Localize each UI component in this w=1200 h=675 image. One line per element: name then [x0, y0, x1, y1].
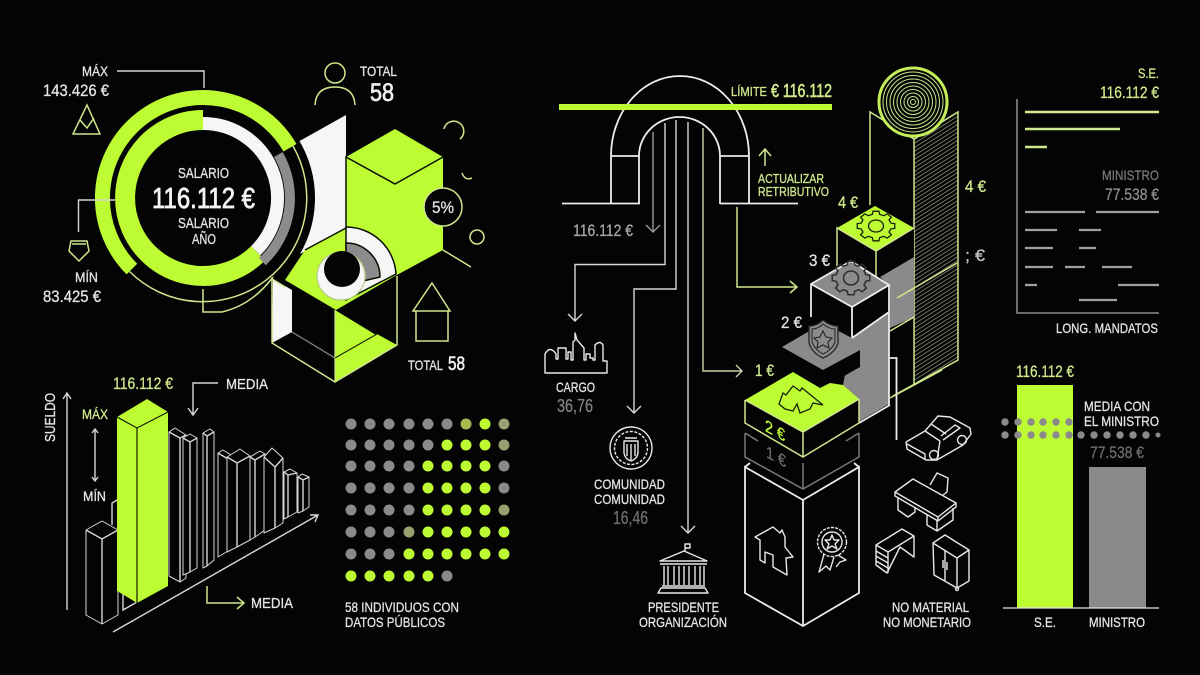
- step 3 block: [811, 261, 889, 405]
- lower media label: [207, 586, 293, 612]
- arch: [562, 76, 798, 204]
- arrow: short: [646, 132, 660, 232]
- comunidad block: 16,46: [613, 508, 648, 528]
- centre text: SALARIO: [178, 166, 229, 182]
- ministro value: 77.538 €: [1090, 443, 1144, 462]
- dot caption: DATOS PÚBLICOS: [345, 614, 445, 630]
- grey quarter ring: [346, 243, 380, 285]
- arrow: comunidad: [627, 120, 676, 413]
- thin min bar: [112, 500, 137, 610]
- icon: person: [315, 63, 355, 105]
- panel: comparison bar chart: [1001, 362, 1160, 630]
- y axis arrow: [63, 393, 71, 610]
- dot matrix: 58 individuals: [345, 418, 510, 630]
- icon: gear on step 3: [832, 261, 870, 295]
- white base box: [745, 463, 859, 626]
- connector lines: [890, 263, 957, 398]
- icon: wardrobe: [933, 535, 969, 590]
- grey bar: [1089, 467, 1146, 608]
- dot caption: 58 INDIVIDUOS CON: [345, 599, 459, 615]
- total people: [315, 63, 397, 107]
- green bar: [1017, 385, 1073, 608]
- ministro label: [1102, 167, 1159, 204]
- media label: EL MINISTRO: [1084, 413, 1159, 429]
- axes: [1017, 99, 1159, 313]
- decorative arcs and circle: [443, 121, 484, 267]
- ghost grey block: [745, 433, 859, 489]
- white arc: [203, 123, 278, 251]
- S.E. value: 116.112 €: [1016, 362, 1074, 381]
- step labels: 4 €: [838, 193, 858, 212]
- media label: MEDIA CON: [1084, 398, 1150, 414]
- icon: gear on step 4: [857, 211, 895, 241]
- presidente block: PRESIDENTE: [648, 599, 719, 615]
- step 4 block: [837, 206, 914, 291]
- ghost grey block: 1 €: [766, 442, 787, 472]
- axis label: LONG. MANDATOS: [1056, 320, 1158, 336]
- caption: [883, 599, 971, 630]
- callout: min salary: 83.425 €: [43, 287, 101, 306]
- icon: police badge: [809, 320, 838, 358]
- grey bars: [1025, 212, 1159, 300]
- icon: car: [906, 416, 971, 460]
- icon: city skyline: [545, 333, 607, 373]
- arrow: step one: [703, 128, 742, 377]
- presidente block: ORGANIZACIÓN: [639, 614, 727, 630]
- quarter circle: [346, 227, 396, 300]
- S.E. label: S.E.: [1138, 65, 1159, 81]
- comunidad block: COMUNIDAD: [594, 491, 665, 507]
- caption: NO MATERIAL: [892, 599, 969, 615]
- green bars: [1025, 112, 1159, 147]
- step labels: 2 €: [781, 313, 802, 332]
- value label: 116.112 €: [113, 374, 173, 393]
- centre text: 116.112 €: [152, 183, 255, 215]
- S.E. label: [1100, 65, 1159, 102]
- x labels: MINISTRO: [1089, 614, 1145, 630]
- non monetary items: [876, 416, 971, 630]
- callout: max salary: [43, 64, 204, 134]
- limit label: LÍMITE: [731, 84, 767, 99]
- limit bar: [559, 104, 832, 110]
- amount label: 116.112 €: [573, 221, 633, 240]
- cargo block: [545, 333, 607, 416]
- 5% badge: [424, 188, 462, 226]
- grey faces: [843, 257, 914, 421]
- caption: NO MONETARIO: [883, 614, 971, 630]
- total people: TOTAL: [360, 64, 397, 79]
- connector: bottom of donut: [203, 277, 273, 312]
- callout: max salary: MÁX: [82, 64, 108, 79]
- icon: small desk with drawers: [876, 529, 914, 573]
- label: step on face: 2 €: [765, 416, 786, 446]
- update label: RETRIBUTIVO: [758, 184, 829, 199]
- range labels: MÁX: [82, 406, 109, 422]
- callout: max salary: 143.426 €: [43, 81, 109, 100]
- total houses: TOTAL: [408, 358, 443, 373]
- step labels: 1 €: [755, 361, 774, 380]
- icon: house: [413, 283, 450, 341]
- flow diagram: arch and limit: [559, 76, 832, 533]
- icon: crest seal: [610, 427, 652, 469]
- comunidad block: COMUNIDAD: [594, 476, 665, 492]
- arrow: to steps: [737, 207, 797, 293]
- limit label: [731, 81, 832, 101]
- range labels: [82, 406, 109, 504]
- S.E. label: 116.112 €: [1100, 83, 1159, 102]
- 5% badge: 5%: [432, 198, 454, 217]
- media label: MEDIA: [226, 376, 268, 393]
- panel: mandate length chart: [1017, 65, 1159, 336]
- icon: shield: [69, 241, 89, 261]
- total houses: [408, 283, 465, 375]
- dots: [346, 418, 510, 582]
- donut chart: salario: [102, 98, 307, 302]
- update label: [758, 149, 829, 199]
- step labels: ; €: [965, 246, 986, 265]
- panel: isometric shapes behind donut: [91, 86, 484, 382]
- x labels: [1034, 614, 1145, 630]
- step labels: 3 €: [809, 251, 830, 270]
- eye circle: [317, 251, 365, 300]
- icon: institution building: [658, 544, 708, 593]
- centre text: [152, 166, 255, 248]
- icon: rosette: [818, 528, 846, 572]
- update label: ACTUALIZAR: [758, 171, 824, 186]
- wood log: [879, 68, 947, 136]
- grey arc: [262, 154, 290, 262]
- hatched tower: [870, 112, 958, 396]
- centre text: SALARIO: [178, 216, 229, 232]
- dotted average rows: [1001, 418, 1160, 439]
- bars: [86, 428, 309, 624]
- inner green ring: [125, 120, 258, 276]
- ministro label: 77.538 €: [1105, 185, 1159, 204]
- step 1 green block: [745, 372, 859, 457]
- step 2 block: [782, 320, 860, 400]
- dot caption: [345, 599, 459, 630]
- lower media label: MEDIA: [251, 595, 293, 612]
- media label: [188, 376, 268, 415]
- range labels: MÍN: [83, 488, 106, 504]
- callout: min salary: [43, 200, 115, 306]
- thin arc: [130, 146, 307, 302]
- outer green ring: [102, 98, 290, 269]
- y axis label: SUELDO: [42, 393, 59, 442]
- x axis arrow: [113, 515, 318, 632]
- hexagon inner edges: [305, 157, 443, 250]
- ministro label: MINISTRO: [1102, 167, 1159, 183]
- highlighted green bar: [117, 399, 168, 603]
- green hexagon: [285, 129, 443, 310]
- cargo block: 36,76: [557, 396, 593, 416]
- isometric tower with steps: [745, 68, 958, 626]
- icon: desk: [895, 473, 956, 531]
- presidente block: [639, 544, 727, 630]
- arrow: cargo: [568, 123, 665, 321]
- baseline: [1003, 607, 1159, 609]
- step labels: 4 €: [965, 177, 986, 196]
- centre text: AÑO: [192, 231, 216, 248]
- limit label: € 116.112: [771, 81, 832, 101]
- isometric bar chart: [42, 374, 318, 632]
- lower cube: [272, 276, 397, 382]
- total houses: 58: [448, 354, 465, 375]
- x labels: S.E.: [1034, 614, 1056, 630]
- icon: house on green top: [779, 386, 823, 413]
- total people: 58: [370, 79, 394, 107]
- arrow: presidente: [681, 122, 695, 533]
- first bar: [86, 521, 118, 624]
- media label: [1084, 398, 1159, 429]
- comunidad block: [594, 427, 665, 528]
- icon: iso house: [755, 527, 793, 575]
- step labels: [755, 177, 986, 380]
- icon: mountain: [73, 105, 100, 134]
- cargo block: CARGO: [556, 379, 595, 395]
- callout: min salary: MÍN: [75, 270, 98, 285]
